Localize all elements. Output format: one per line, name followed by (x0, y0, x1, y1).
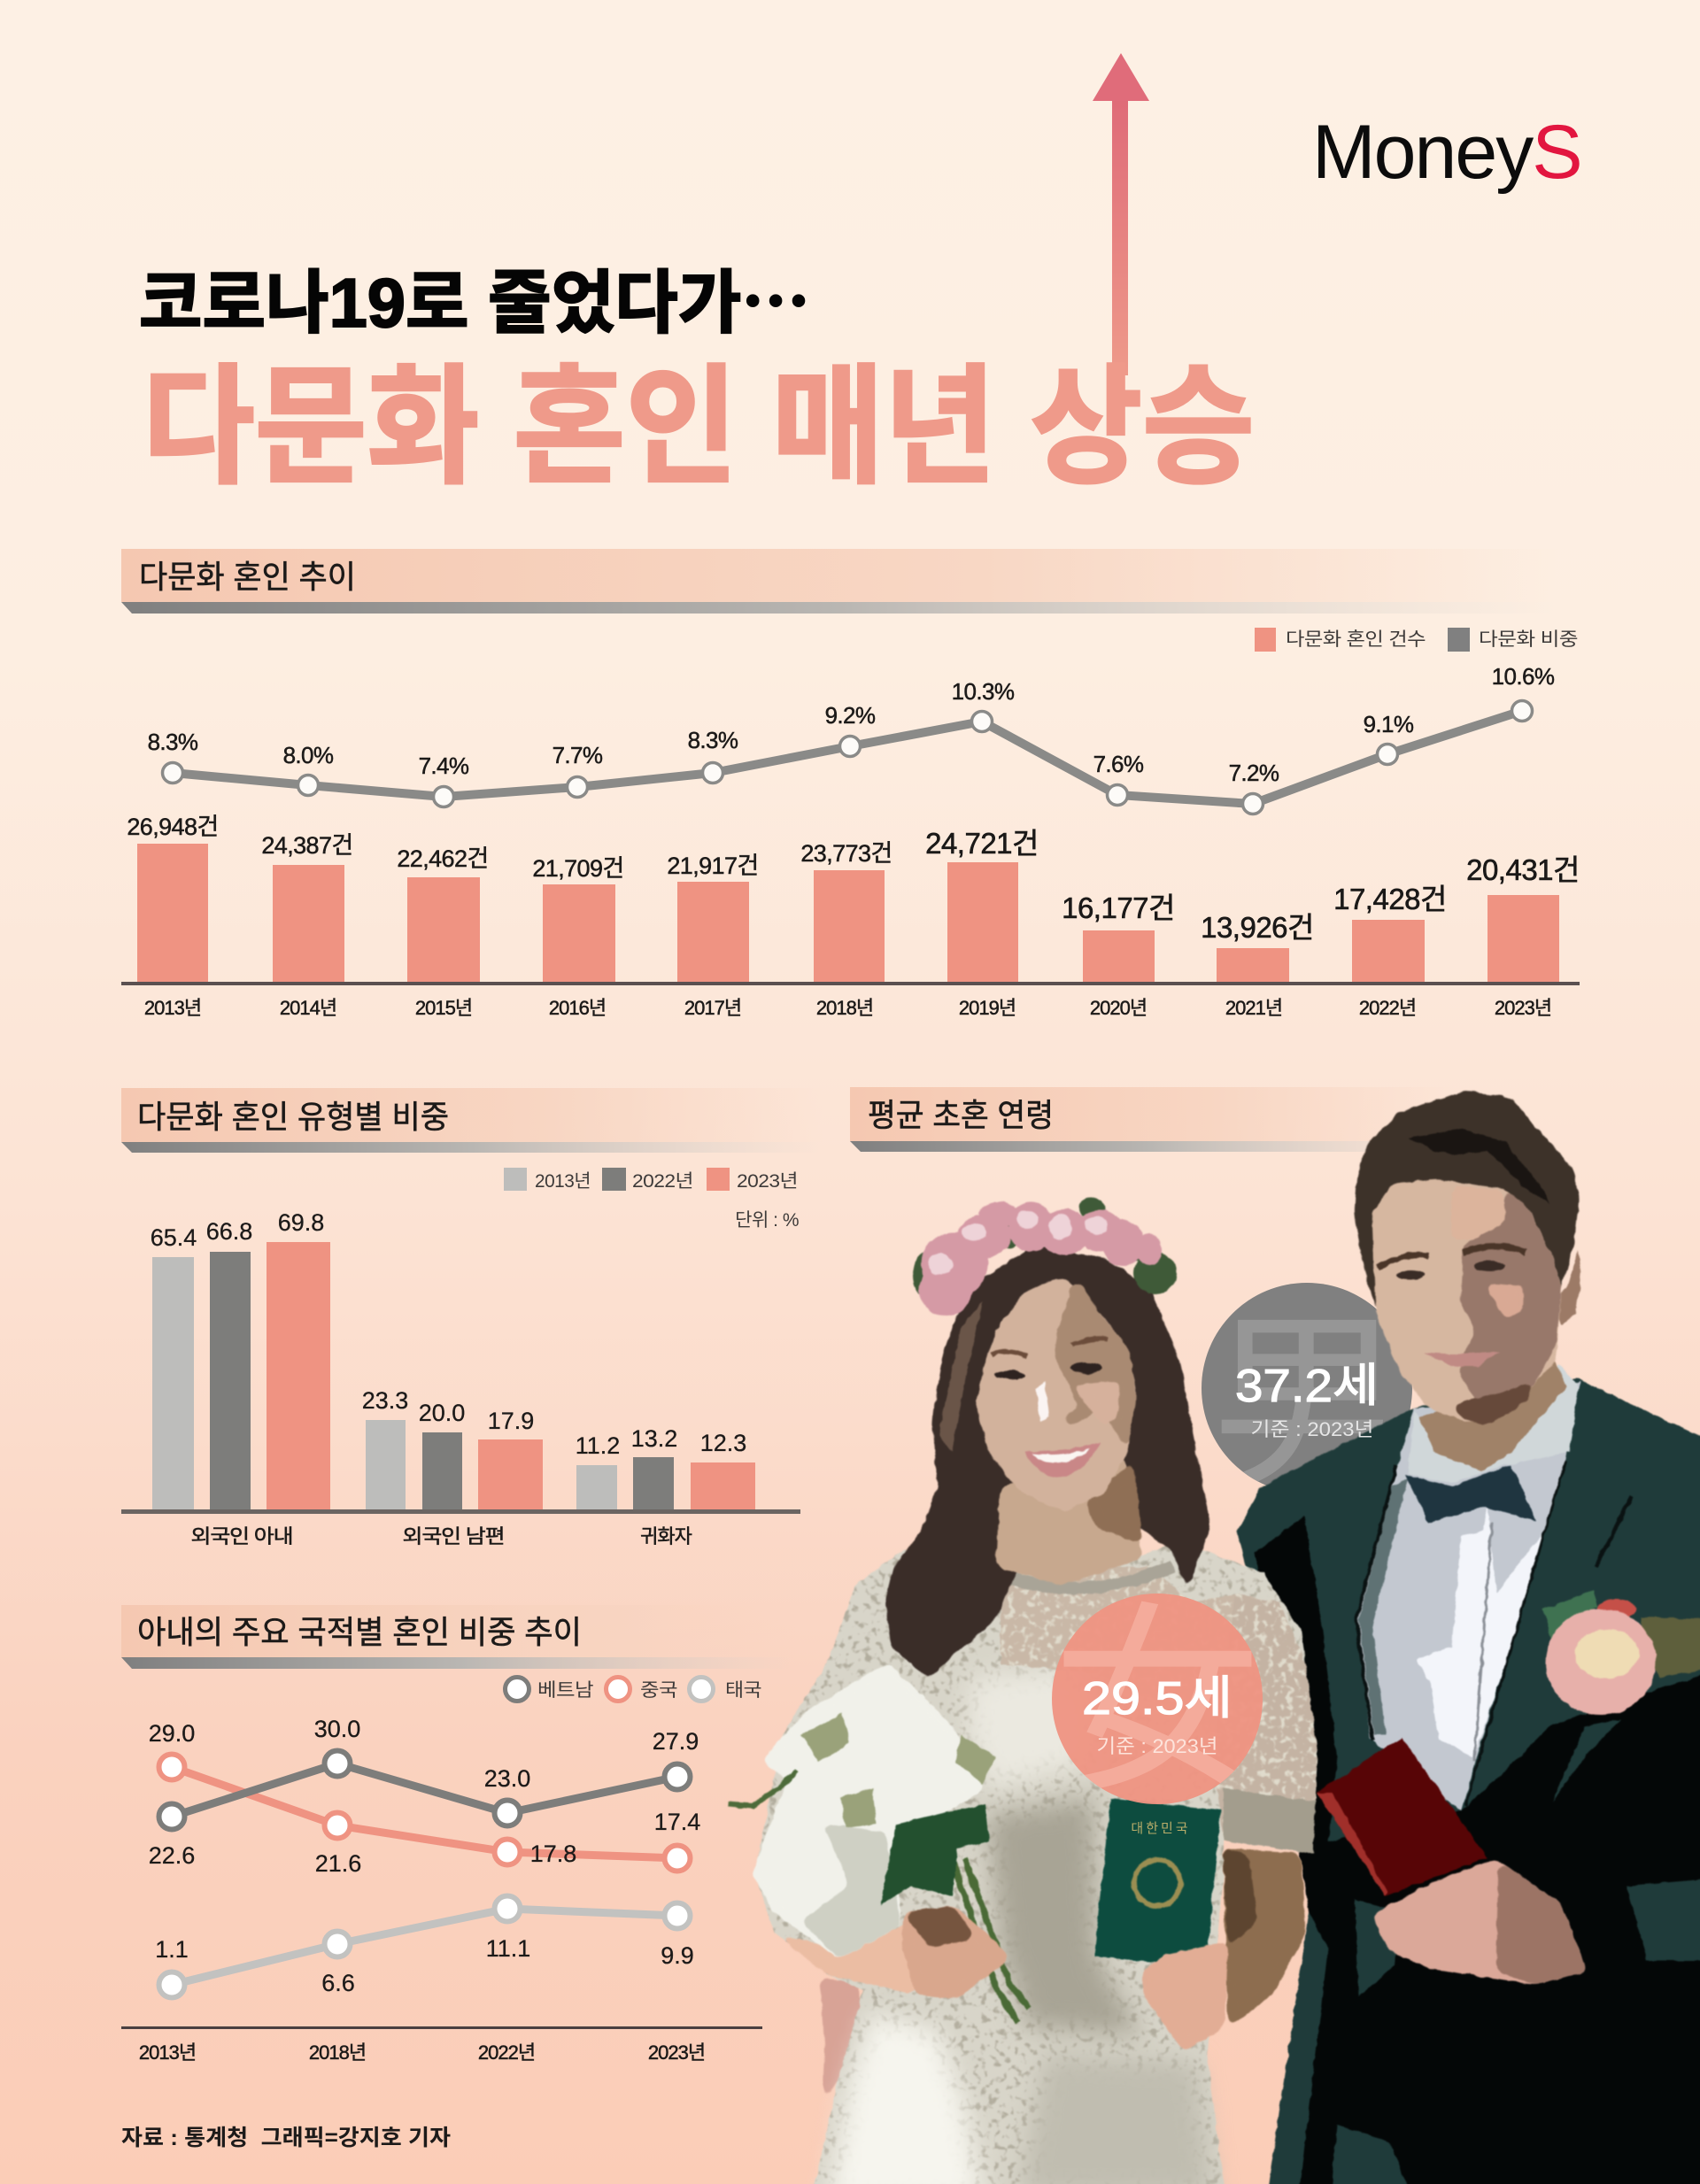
passport spine (1317, 1793, 1387, 1896)
groom suit shadow (1255, 1516, 1700, 2184)
bar chart: marriage types: 20.0 (419, 1400, 465, 1426)
line chart: multicultural share: 8.0% (283, 742, 334, 768)
heading: marriage types (121, 1088, 823, 1153)
bar chart: marriage counts: 2021년 (1225, 997, 1282, 1019)
bar chart: marriage counts: 2020년 (1090, 997, 1147, 1019)
neckline lace (996, 1567, 1173, 1588)
dress light (828, 2014, 983, 2184)
heading: marriage trend: 다문화 혼인 추이 (139, 559, 356, 595)
dress (754, 1541, 1318, 2184)
passport emblem (1134, 1860, 1180, 1906)
callout: groom age text (1235, 1361, 1379, 1440)
bar chart: marriage types: 13.2 (631, 1425, 677, 1452)
bar chart: marriage counts: 2016년 (549, 997, 606, 1019)
bar chart: marriage types (121, 1209, 800, 1547)
heading: average first marriage age (850, 1087, 1452, 1152)
groom hand (1372, 1862, 1587, 1984)
heading: average first marriage age: 평균 초혼 연령 (868, 1097, 1054, 1133)
bar chart: marriage counts: 20,431건 (1466, 853, 1580, 886)
bar chart: marriage types: 11.2 (576, 1432, 620, 1459)
neck (996, 1456, 1142, 1585)
heading: marriage types: 다문화 혼인 유형별 비중 (137, 1099, 449, 1135)
line chart: wife nationality: 22.6 (149, 1842, 195, 1869)
bouquet stems (952, 1859, 1029, 2023)
forehead light (1452, 1186, 1505, 1239)
green passport (1094, 1798, 1221, 1967)
bar chart: marriage types: 외국인 아내 (191, 1525, 292, 1547)
collar (1408, 1363, 1579, 1483)
bouquet accents (801, 1713, 996, 1828)
beard shadow (1452, 1381, 1534, 1425)
bar chart: marriage counts: 26,948건 (127, 814, 219, 840)
bouquet leaves (880, 1804, 989, 1905)
arm shadow (1224, 1848, 1257, 1948)
legend: nationality chart: 중국 (640, 1680, 677, 1701)
bar chart: marriage counts: 23,773건 (800, 840, 892, 867)
line chart: multicultural share: 10.3% (952, 678, 1015, 705)
bouquet sprig (728, 1771, 797, 1806)
illustration: groom (1237, 1092, 1700, 2184)
line chart: wife nationality: 21.6 (315, 1850, 361, 1877)
bar chart: marriage types: 외국인 남편 (402, 1525, 505, 1547)
callout: bride age circle: 29.5세 (1082, 1673, 1232, 1725)
line chart: multicultural share: 9.1% (1364, 711, 1414, 737)
title: second line: 다문화 혼인 매년 상승 (143, 355, 1255, 499)
title: first line: 코로나19로 줄었다가… (139, 248, 810, 347)
legend: nationality chart: 태국 (725, 1680, 761, 1701)
callout: groom age circle: 男 (1208, 1296, 1406, 1519)
bar chart: marriage types: 17.9 (488, 1408, 534, 1434)
callout: bride age circle: 女 (1054, 1587, 1261, 1820)
legend: trend chart: 다문화 비중 (1479, 629, 1578, 650)
bar chart: marriage counts: 2019년 (959, 997, 1016, 1019)
flower crown (919, 1202, 1162, 1316)
line chart: multicultural share: 7.6% (1093, 751, 1144, 777)
callout: groom age text: 기준 : 2023년 (1250, 1418, 1374, 1440)
line chart: wife nationality: 2013년 (139, 2041, 196, 2064)
groom hand shadow (1496, 1862, 1587, 1984)
legend: type chart: 2022년 (632, 1171, 693, 1192)
shirt placket (1474, 1523, 1492, 1762)
hair highlight (939, 1301, 983, 1452)
legend: type chart: 2023년 (737, 1171, 798, 1192)
groom suit highlights (1328, 1719, 1700, 2184)
bar chart: marriage counts: 17,428건 (1333, 883, 1447, 915)
arrow: rising (1093, 53, 1149, 375)
groom shirt (1357, 1381, 1580, 1811)
bar chart: marriage types: 69.8 (278, 1209, 324, 1236)
bow tie (1405, 1465, 1536, 1523)
face shadow (1054, 1279, 1136, 1452)
line chart: wife nationality: 2023년 (648, 2041, 705, 2064)
bar chart: marriage types: 12.3 (700, 1430, 746, 1456)
lapel right (1465, 1461, 1565, 1806)
line chart: wife nationality: 2018년 (309, 2041, 366, 2064)
heading: marriage trend (121, 549, 1558, 614)
line chart: wife nationality: 9.9 (661, 1942, 694, 1969)
bride hand with bouquet (903, 1905, 1009, 1999)
bride eyes and brows (992, 1339, 1109, 1357)
lapel inner (1356, 1465, 1396, 1740)
line chart: wife nationality: 11.1 (486, 1935, 530, 1962)
line chart: wife nationality: 2022년 (478, 2041, 535, 2064)
bar chart: marriage counts: 13,926건 (1201, 911, 1314, 944)
bar chart: marriage counts: 24,387건 (261, 832, 353, 859)
lips (1423, 1352, 1499, 1366)
source credit: 자료 : 통계청 그래픽=강지호 기자 (121, 2126, 451, 2150)
bar chart: marriage types: 66.8 (206, 1218, 252, 1245)
lapel line (1596, 1496, 1632, 1567)
cheek light (1073, 1381, 1120, 1425)
line chart: multicultural share: 7.4% (419, 752, 469, 779)
groom face (1372, 1180, 1561, 1423)
bar chart: marriage types: 귀화자 (640, 1525, 692, 1547)
legend: type chart: 단위 : % (735, 1210, 799, 1231)
shirt lapel shading (1359, 1478, 1408, 1735)
bride hand with passport (1143, 1942, 1228, 2051)
sleeve (1213, 1594, 1318, 1853)
line chart: wife nationality: 17.8 (530, 1841, 576, 1867)
bar chart: marriage counts: 16,177건 (1062, 891, 1175, 924)
legend: trend chart (1255, 628, 1578, 652)
flower crown highlights (928, 1211, 1108, 1275)
legend: nationality chart: 베트남 (537, 1680, 593, 1701)
dress shade (987, 1797, 1142, 2036)
neck (1419, 1350, 1567, 1471)
line chart: multicultural share: 9.2% (825, 702, 876, 729)
bouquet shade (801, 1824, 900, 1958)
skirt shade (1018, 2054, 1213, 2184)
eyes (1396, 1270, 1425, 1279)
line chart: wife nationality: 6.6 (321, 1970, 355, 1996)
legend: nationality chart (505, 1677, 761, 1702)
brows (1379, 1246, 1526, 1268)
logo: MoneyS: MoneyS (1312, 110, 1580, 195)
arm (1224, 1848, 1305, 2027)
neck shadow (1085, 1461, 1142, 1545)
legend: trend chart: 다문화 혼인 건수 (1286, 629, 1426, 650)
bar chart: marriage counts: 2018년 (816, 997, 873, 1019)
line chart: multicultural share (148, 663, 1555, 814)
bar chart: marriage counts: 21,917건 (667, 853, 759, 879)
line chart: wife nationality: 17.4 (654, 1809, 700, 1835)
ear (1554, 1251, 1581, 1325)
groom hair (1355, 1092, 1579, 1316)
illustration: bride (728, 1198, 1318, 2184)
nose highlight (1036, 1381, 1049, 1421)
forearm (775, 1921, 916, 1995)
boutonniere flower (1546, 1609, 1656, 1715)
line chart: wife nationality: 23.0 (484, 1765, 530, 1792)
dress lace top (970, 1669, 1089, 1788)
boutonniere bud (1597, 1599, 1636, 1620)
line chart: wife nationality: 29.0 (149, 1720, 195, 1747)
passport title: 대한민국 (1131, 1821, 1191, 1836)
shirt highlight (1417, 1505, 1545, 1757)
red passport (1317, 1738, 1488, 1896)
bride teeth (1032, 1448, 1091, 1463)
groom hand at waist (821, 1979, 868, 2100)
cheek light (1485, 1284, 1523, 1319)
heading: wife nationality (121, 1605, 797, 1669)
line chart: wife nationality: 1.1 (155, 1936, 189, 1963)
flower crown greens (913, 1198, 1177, 1298)
legend: type chart: 2013년 (535, 1171, 591, 1192)
bar chart: marriage counts: 2017년 (684, 997, 741, 1019)
bar chart: marriage counts: 2013년 (144, 997, 201, 1019)
bar chart: marriage counts: 22,462건 (397, 845, 489, 872)
line chart: multicultural share: 7.2% (1229, 760, 1279, 786)
line chart: multicultural share: 10.6% (1492, 663, 1555, 690)
face shadow (1458, 1189, 1561, 1419)
bride lips (1024, 1443, 1101, 1477)
callout: bride age circle: 기준 : 2023년 (1096, 1735, 1218, 1757)
bouquet white flowers (753, 1663, 985, 1958)
bar chart: marriage counts: 24,721건 (925, 827, 1039, 860)
heading: wife nationality: 아내의 주요 국적별 혼인 비중 추이 (137, 1614, 582, 1650)
bar chart: marriage counts: 2023년 (1495, 997, 1551, 1019)
bar chart: marriage counts: 21,709건 (532, 855, 624, 882)
boutonniere sprig (1641, 1617, 1700, 1678)
bride hair (885, 1246, 1210, 1679)
line chart: wife nationality: 27.9 (653, 1728, 699, 1755)
boutonniere leaves (1543, 1590, 1598, 1640)
bar chart: marriage types: 65.4 (151, 1224, 197, 1251)
line chart: wife nationality: 30.0 (314, 1716, 360, 1742)
line chart: multicultural share: 8.3% (688, 727, 738, 753)
bar chart: marriage counts: 2014년 (280, 997, 336, 1019)
sleeve lace (1224, 1788, 1316, 1853)
bar chart: marriage counts: 2022년 (1359, 997, 1416, 1019)
bar chart: marriage counts (121, 814, 1580, 1019)
callout: groom age text: 37.2세 (1235, 1361, 1379, 1412)
groom suit (1237, 1378, 1700, 2184)
bar chart: marriage counts: 2015년 (415, 997, 472, 1019)
line chart: wife nationality (121, 1716, 762, 2064)
chest (1001, 1567, 1266, 1735)
bar chart: marriage types: 23.3 (362, 1387, 408, 1414)
hair dark strands (1408, 1129, 1549, 1204)
bride face (977, 1277, 1136, 1511)
line chart: multicultural share: 8.3% (148, 729, 198, 755)
line chart: multicultural share: 7.7% (552, 742, 603, 768)
hand shadow (904, 1905, 974, 1948)
legend: type chart (504, 1168, 799, 1231)
